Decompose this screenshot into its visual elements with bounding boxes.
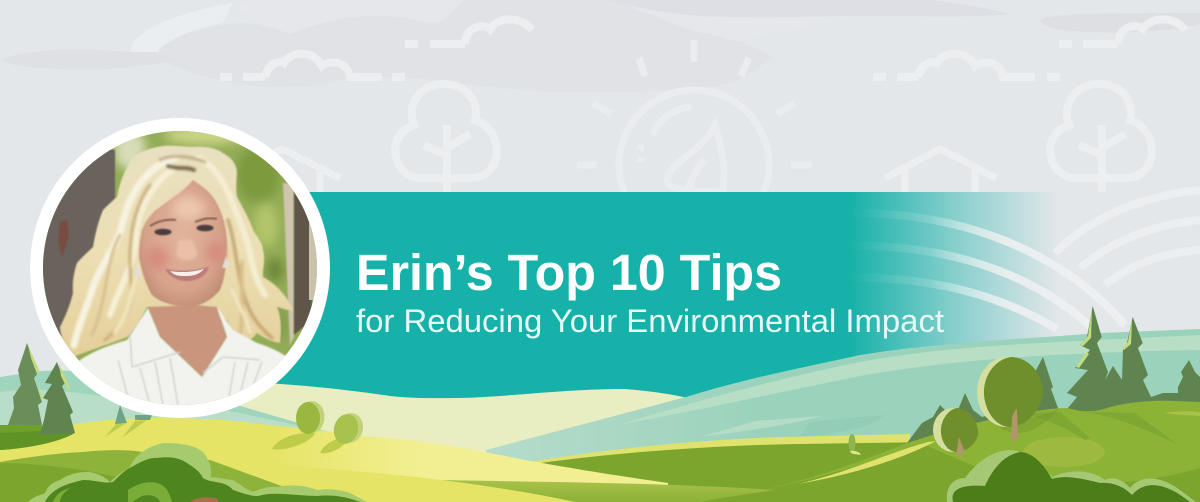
face xyxy=(139,180,227,307)
left mint hills xyxy=(0,370,340,450)
teal banner xyxy=(250,192,1060,402)
line icon: tree left xyxy=(395,84,497,192)
eyes xyxy=(154,225,214,235)
pale hill xyxy=(200,380,688,502)
pine trees right xyxy=(1067,306,1200,412)
line icon: house left xyxy=(225,149,340,192)
line icons: clouds xyxy=(220,19,1185,77)
blouse folds xyxy=(118,333,262,405)
right green hill xyxy=(700,401,1200,502)
clouds in the sky xyxy=(2,0,1200,92)
hair strands xyxy=(74,156,272,345)
line icon: house right xyxy=(885,149,996,192)
blouse xyxy=(79,308,286,405)
yellow strip and dark green field xyxy=(530,434,930,502)
line icon: sun with leaf xyxy=(577,40,812,240)
subtitle: for Reducing Your Environmental Impact xyxy=(356,303,944,339)
right hill highlight curve xyxy=(798,441,936,484)
small round trees centre xyxy=(272,401,366,453)
cheeks xyxy=(146,241,225,269)
mouth xyxy=(165,267,209,281)
hair xyxy=(60,146,293,357)
title: Erin’s Top 10 Tips xyxy=(356,244,782,301)
right hill patches xyxy=(1023,437,1105,467)
big tree right xyxy=(977,357,1060,441)
pine highlights right xyxy=(1076,308,1132,368)
bush right xyxy=(947,450,1196,502)
portrait photo xyxy=(40,125,320,408)
line icon: rolling hills arcs xyxy=(850,190,1200,329)
pine trees left xyxy=(8,343,75,435)
small trees behind portrait xyxy=(105,405,152,438)
bush left xyxy=(28,443,367,502)
light shards on mint hill xyxy=(700,416,822,437)
forehead highlight xyxy=(172,196,204,220)
yellow hill xyxy=(0,418,668,502)
mint hill right xyxy=(486,329,1200,502)
neck xyxy=(148,305,227,377)
lower darker green of right hill xyxy=(700,445,1200,502)
mid green wedge xyxy=(442,480,775,502)
tree trunk right xyxy=(283,183,294,345)
yellow front hill xyxy=(0,452,580,502)
small tree right xyxy=(933,408,978,455)
line icon: tree right xyxy=(1050,84,1152,192)
teeth xyxy=(170,269,204,276)
banner illustration xyxy=(0,118,1200,502)
left green fields xyxy=(0,425,320,502)
photo background xyxy=(40,128,320,408)
portrait frame xyxy=(30,118,330,418)
brows xyxy=(150,218,217,226)
back pines right xyxy=(907,357,1058,450)
tree trunk left xyxy=(43,148,116,337)
earrings xyxy=(133,256,230,277)
nose xyxy=(176,240,198,260)
light band on mint hill xyxy=(618,335,1200,425)
tiny far tree xyxy=(848,434,861,455)
foliage patches xyxy=(114,125,286,343)
bark mark xyxy=(58,220,69,258)
